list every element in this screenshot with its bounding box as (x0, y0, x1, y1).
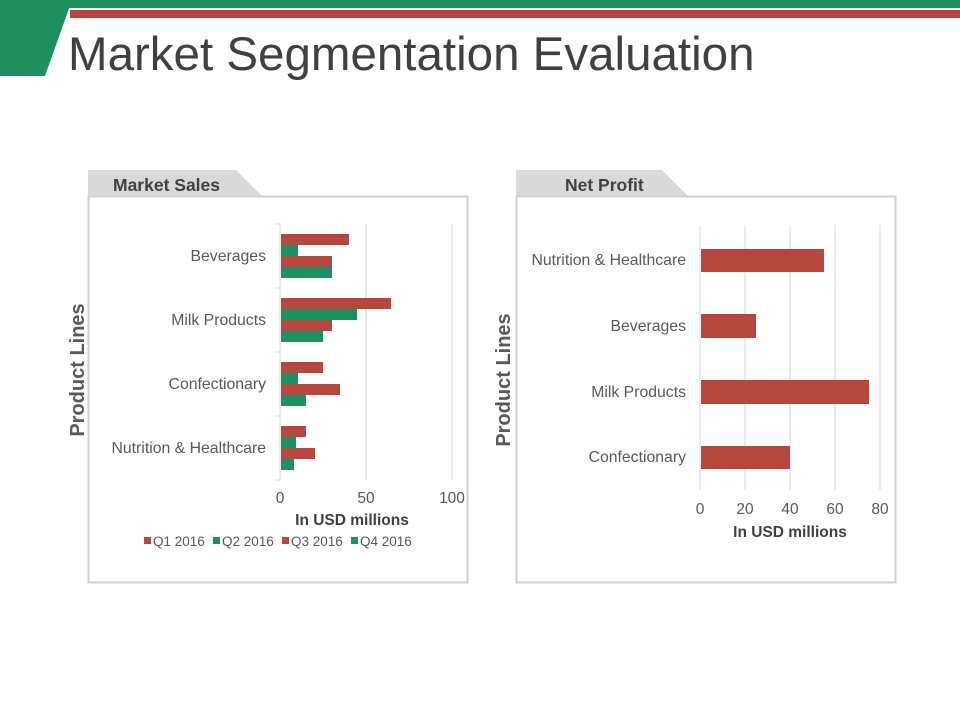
category labels: net profit: Beverages (610, 318, 686, 335)
axis ticks: 0 (276, 490, 285, 507)
tab: Net Profit: Net Profit (565, 175, 644, 195)
category labels: Beverages (190, 248, 266, 265)
category labels: net profit: Nutrition & Healthcare (531, 252, 686, 269)
header accent: green parallelogram (0, 0, 72, 76)
y axis title: Product Lines (67, 303, 89, 437)
bar chart: net profit (701, 249, 869, 469)
title: Market Segmentation Evaluation (68, 28, 755, 81)
panel: net profit (493, 170, 896, 582)
axis ticks: 50 (357, 490, 375, 507)
axis ticks: net profit: 0 (696, 501, 705, 518)
legend: Q1 2016 (153, 534, 205, 549)
axis title: In USD millions (295, 512, 409, 529)
category labels: net profit (531, 252, 686, 466)
category labels: Confectionary (169, 376, 266, 393)
axis ticks (276, 490, 465, 507)
axis ticks: net profit: 20 (736, 501, 754, 518)
header band: green top strip (0, 0, 960, 8)
axis title: net profit: In USD millions (733, 524, 847, 541)
category labels: net profit: Confectionary (589, 449, 686, 466)
legend: Q4 2016 (360, 534, 412, 549)
panel: market sales (67, 170, 468, 582)
legend: Q3 2016 (291, 534, 343, 549)
y axis title: net profit: Product Lines (493, 313, 515, 447)
legend (144, 534, 412, 549)
axis ticks: net profit: 80 (871, 501, 889, 518)
category labels: Milk Products (171, 312, 266, 329)
axis ticks: 100 (439, 490, 465, 507)
axis ticks: net profit (696, 501, 889, 518)
legend: Q2 2016 (222, 534, 274, 549)
axis ticks: net profit: 40 (781, 501, 799, 518)
category labels: net profit: Milk Products (591, 384, 686, 401)
category labels (111, 248, 266, 457)
category labels: Nutrition & Healthcare (111, 440, 266, 457)
bar chart: market sales (281, 234, 391, 470)
tab: Market Sales (88, 170, 262, 196)
axis ticks: net profit: 60 (826, 501, 844, 518)
tab: Net Profit (516, 170, 688, 196)
tab: Market Sales: Market Sales (113, 175, 220, 195)
header band: red strip (70, 10, 960, 18)
